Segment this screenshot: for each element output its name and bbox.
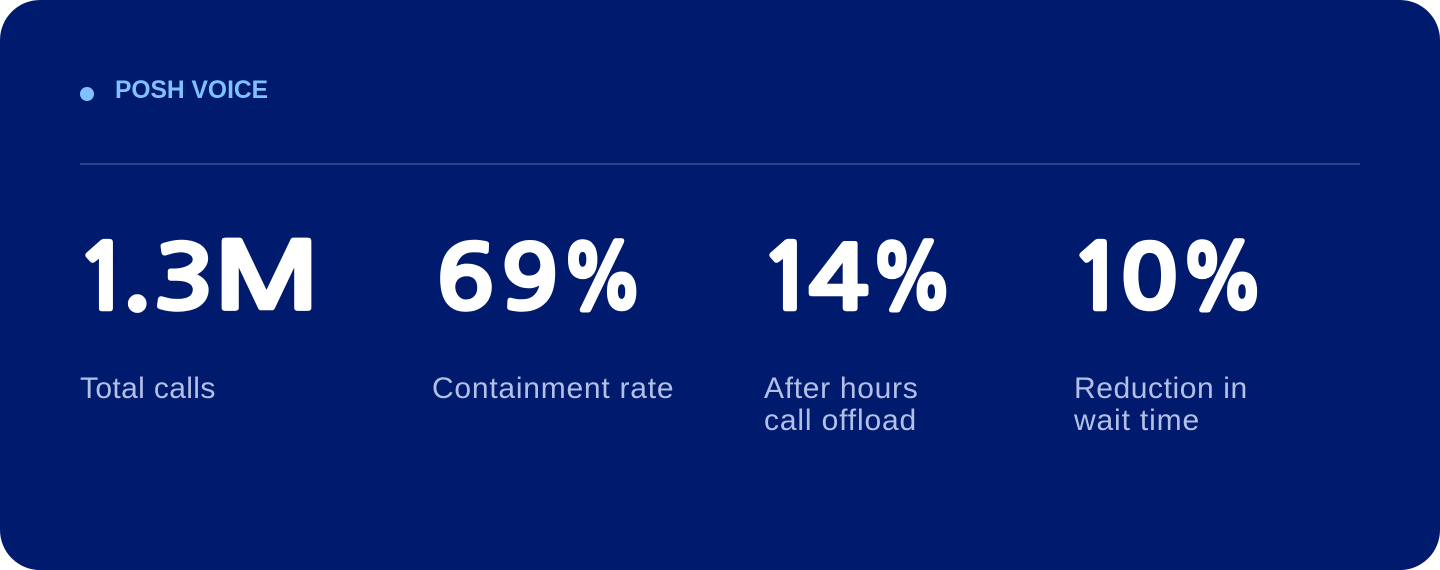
label: Total calls: Total calls [80,372,216,405]
stat: after hours call offload [759,234,953,437]
number: 10%: 0 [1120,236,1179,323]
number: 14%: 1 [759,234,817,323]
number: 1.3M: . [122,224,151,320]
number: 14%: % [870,236,953,323]
label: After hours call offload: call offload [764,404,917,437]
heading: POSH VOICE: POSH VOICE [115,77,268,104]
label: After hours call offload [764,372,918,437]
stat: total calls [75,224,320,405]
number: 1.3M: 1 [75,234,133,323]
number: 69%: 9 [501,236,559,323]
stat: reduction in wait time [1069,234,1264,437]
number: 14%: 4 [808,236,869,323]
label: Containment rate: Containment rate [432,372,674,405]
number: 10%: 1 [1069,234,1127,323]
number: 10% [1069,234,1264,323]
number: 10%: % [1180,236,1264,323]
label: Reduction in wait time: wait time [1074,404,1200,437]
stat: containment rate [432,236,674,405]
number: 69%: % [561,236,643,323]
number: 69% [436,236,643,323]
number: 14% [759,234,953,323]
number: 69%: 6 [436,236,495,323]
icon: section dot [80,87,94,101]
number: 1.3M: 3 [153,236,215,323]
label: After hours call offload: After hours [764,372,918,405]
number: 1.3M: M [214,232,320,324]
number: 1.3M [75,224,320,324]
label: Reduction in wait time [1074,372,1248,437]
label: Reduction in wait time: Reduction in [1074,372,1248,405]
